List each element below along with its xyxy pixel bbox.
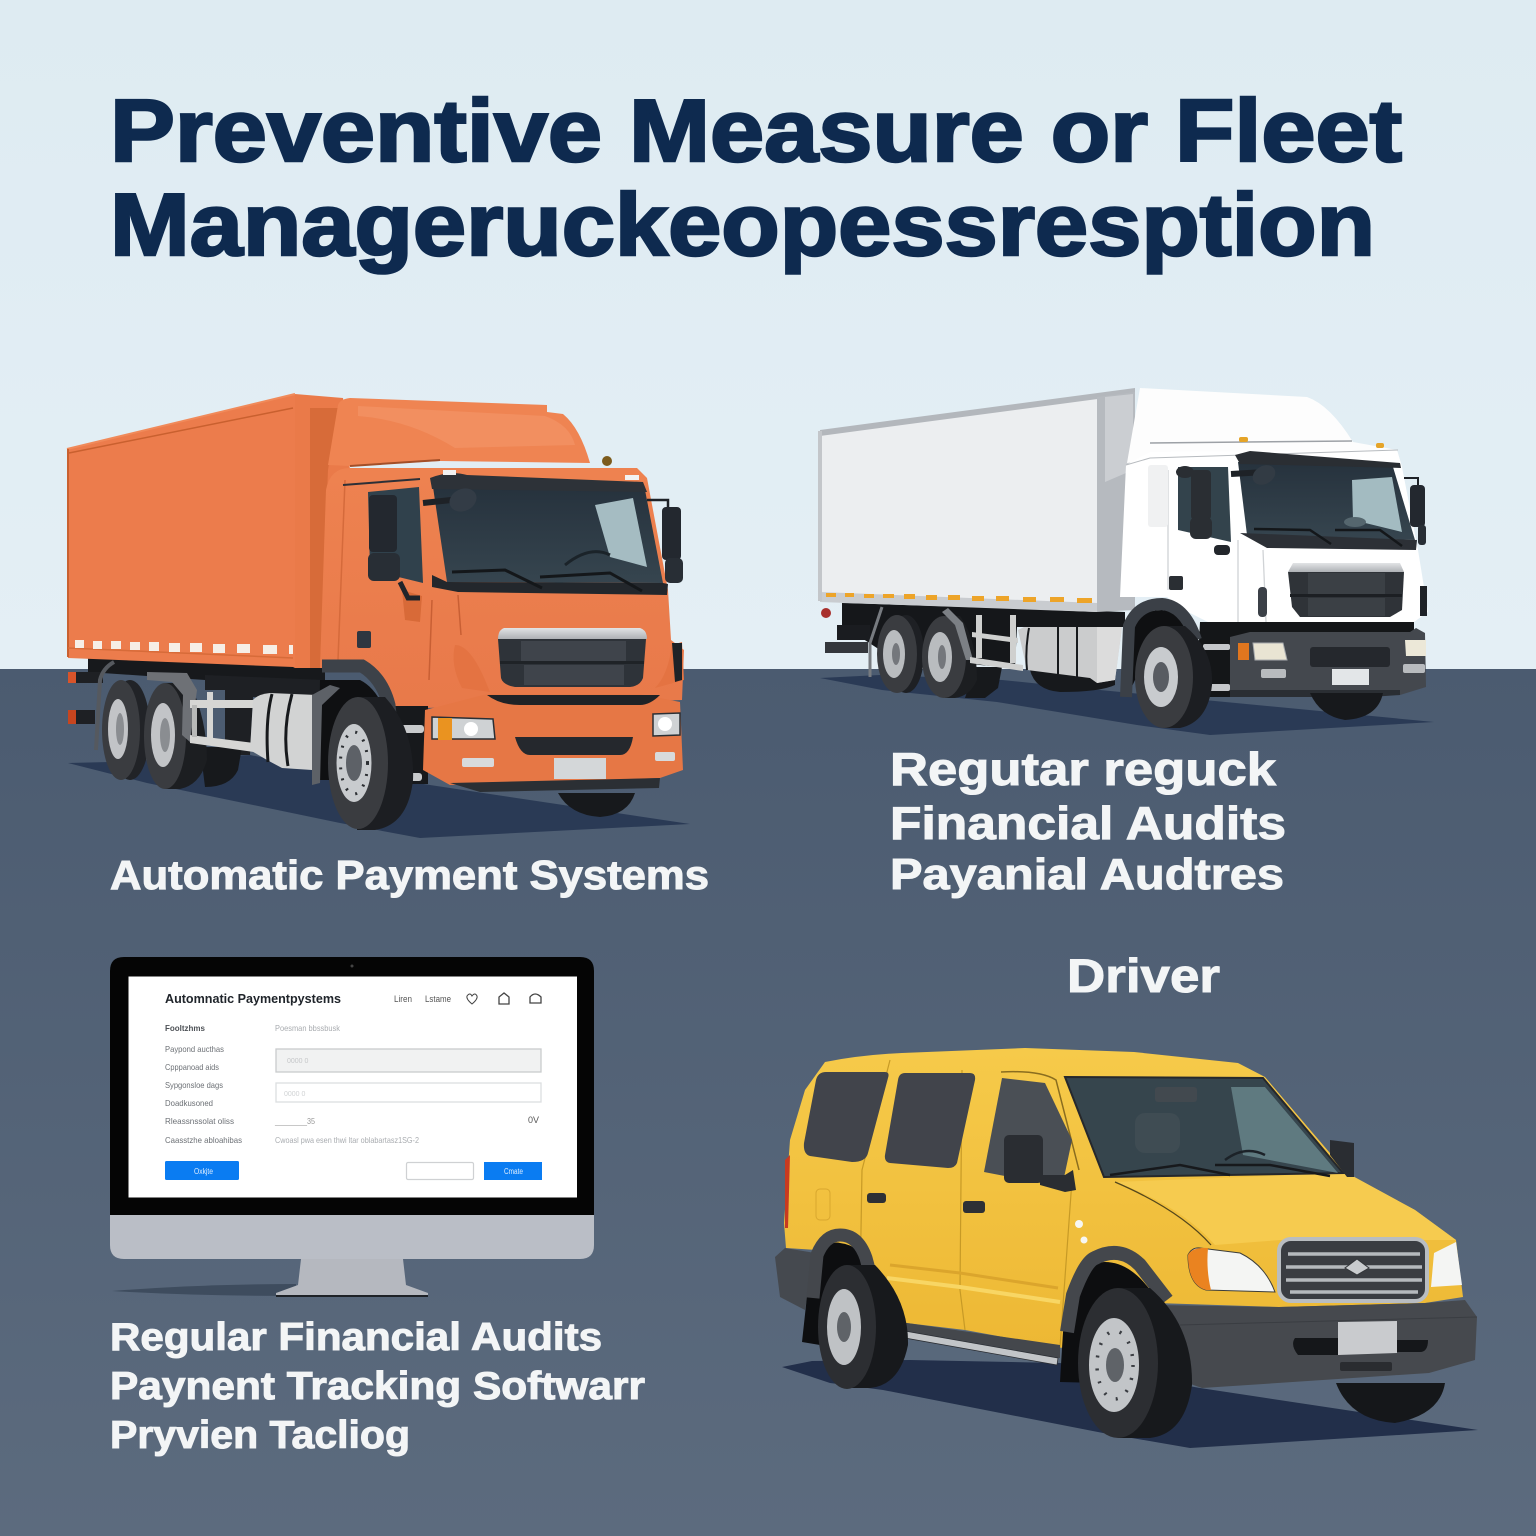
windshield bbox=[1065, 1077, 1343, 1177]
form fields: 0000 0 bbox=[287, 1058, 309, 1065]
hood highlight bbox=[1115, 1173, 1456, 1245]
background sky bbox=[0, 0, 1536, 670]
label: financial audits and payment tracking bbox=[110, 1316, 645, 1457]
form fields: ________35 bbox=[274, 1117, 315, 1126]
undercarriage bbox=[821, 603, 1125, 692]
label: regular truck audits bbox=[890, 743, 1286, 899]
ground shadow bbox=[820, 675, 1434, 735]
label: financial audits and payment tracking: Regular Financial Audits bbox=[110, 1316, 602, 1359]
front wheel bbox=[1135, 626, 1212, 728]
label: automatic payment systems: Automatic Payment Systems bbox=[110, 852, 709, 898]
side mirror bbox=[1004, 1135, 1076, 1192]
label: regular truck audits: Financial Audits bbox=[890, 797, 1286, 849]
monitor stand bbox=[276, 1259, 428, 1297]
right side vent bbox=[1420, 586, 1427, 616]
cab body bbox=[320, 468, 684, 712]
under-cab shadow and step well bbox=[1196, 622, 1414, 697]
side window and mirrors bbox=[368, 487, 423, 598]
cab fairing bbox=[328, 398, 590, 466]
form fields: Cwoasl pwa esen thwi ltar oblabartasz1SG-2 bbox=[275, 1135, 419, 1145]
wheel arch bbox=[1126, 604, 1198, 697]
rear wheel bbox=[818, 1265, 908, 1389]
title: Preventive Measure or Fleet bbox=[110, 81, 1402, 180]
reflective stripe bbox=[826, 593, 1092, 603]
door seams and handles bbox=[785, 1060, 1088, 1347]
right headlight bbox=[1431, 1242, 1462, 1287]
monitor bbox=[110, 957, 594, 1297]
screen header: Lstame bbox=[425, 994, 451, 1004]
bumper bbox=[1156, 1300, 1477, 1388]
background ground bbox=[0, 669, 1536, 1536]
screen header: Liren bbox=[394, 994, 412, 1004]
far front wheel bbox=[558, 793, 635, 817]
form labels: Fooltzhms bbox=[165, 1023, 205, 1033]
screen buttons bbox=[165, 1161, 542, 1180]
cargo box bbox=[67, 394, 350, 668]
form labels: Caasstzhe abloahibas bbox=[165, 1135, 242, 1145]
bumper bbox=[387, 694, 683, 792]
far front wheel bbox=[1336, 1383, 1445, 1423]
windshield bbox=[430, 473, 668, 595]
screen buttons: Oxkjte bbox=[194, 1167, 213, 1176]
right mirror bbox=[1330, 1140, 1354, 1177]
reflective stripe bbox=[75, 640, 293, 654]
rear wheels bbox=[102, 672, 242, 789]
side window and mirrors bbox=[1176, 466, 1231, 555]
far front wheel bbox=[1310, 693, 1383, 720]
title bbox=[110, 81, 1402, 274]
monitor bezel bbox=[110, 957, 594, 1215]
right mirror bbox=[1404, 478, 1426, 545]
chassis frame and tank bbox=[190, 692, 317, 770]
roof lights bbox=[1239, 437, 1384, 448]
rear wheels bbox=[877, 608, 1002, 698]
windows bbox=[804, 1072, 1072, 1187]
grille bbox=[1288, 563, 1404, 617]
body bbox=[784, 1048, 1463, 1348]
cab fairing bbox=[1127, 388, 1402, 467]
heading: driver: Driver bbox=[1067, 949, 1220, 1002]
title: Manageruckeopessresption bbox=[110, 175, 1375, 274]
front wheel bbox=[1078, 1288, 1192, 1438]
monitor shadow bbox=[112, 1284, 296, 1296]
chassis frame and tank bbox=[970, 615, 1122, 683]
form labels: Paypond aucthas bbox=[165, 1044, 224, 1054]
front wheel arch bbox=[1060, 1253, 1167, 1383]
grille bbox=[1279, 1239, 1427, 1301]
yellow van bbox=[775, 1048, 1478, 1448]
screen header bbox=[165, 992, 541, 1006]
screen buttons: Cmate bbox=[504, 1167, 523, 1176]
form fields: 0000 0 bbox=[284, 1091, 306, 1098]
running board bbox=[888, 1322, 1060, 1365]
label: regular truck audits: Payanial Audtres bbox=[890, 850, 1284, 899]
front wheel bbox=[328, 697, 413, 830]
wheel arch bbox=[312, 666, 396, 785]
door seam and handle bbox=[338, 479, 461, 680]
ground shadow bbox=[782, 1360, 1478, 1448]
label: financial audits and payment tracking: Pryvien Tacliog bbox=[110, 1414, 410, 1457]
white truck bbox=[818, 388, 1434, 735]
form labels: Cpppanoad aids bbox=[165, 1062, 219, 1072]
windshield bbox=[1235, 451, 1417, 550]
screen header: Automnatic Paymentpystems bbox=[165, 992, 341, 1006]
rear bumper bbox=[775, 1248, 815, 1310]
cab body bbox=[1120, 450, 1428, 625]
form labels: Rleassnssolat oliss bbox=[165, 1116, 234, 1126]
monitor chin bbox=[110, 1215, 594, 1259]
grille bbox=[498, 628, 647, 687]
step well bbox=[388, 706, 428, 784]
ground shadow bbox=[68, 755, 690, 838]
left headlight bbox=[1188, 1248, 1275, 1292]
label: financial audits and payment tracking: Paynent Tracking Softwarr bbox=[110, 1365, 645, 1408]
form labels: Doadkusoned bbox=[165, 1098, 213, 1108]
cargo box bbox=[818, 388, 1135, 612]
door seam and handle bbox=[1126, 450, 1398, 622]
bumper bbox=[1196, 628, 1426, 697]
screen bbox=[128, 976, 577, 1198]
orange truck bbox=[67, 394, 690, 838]
right mirror bbox=[647, 500, 683, 583]
roof lights bbox=[443, 456, 639, 480]
top mirror bbox=[423, 484, 480, 516]
rear wheel arch bbox=[802, 1235, 898, 1345]
form fields bbox=[274, 1023, 541, 1145]
form fields: 0V bbox=[528, 1115, 539, 1125]
top mirror bbox=[1231, 461, 1279, 489]
label: regular truck audits: Regutar reguck bbox=[890, 743, 1276, 795]
headlight housings bbox=[454, 642, 684, 692]
form fields: Poesman bbssbusk bbox=[275, 1023, 341, 1033]
form labels bbox=[165, 1023, 242, 1145]
undercarriage bbox=[68, 656, 325, 755]
form labels: Sypgonsloe dags bbox=[165, 1080, 223, 1090]
